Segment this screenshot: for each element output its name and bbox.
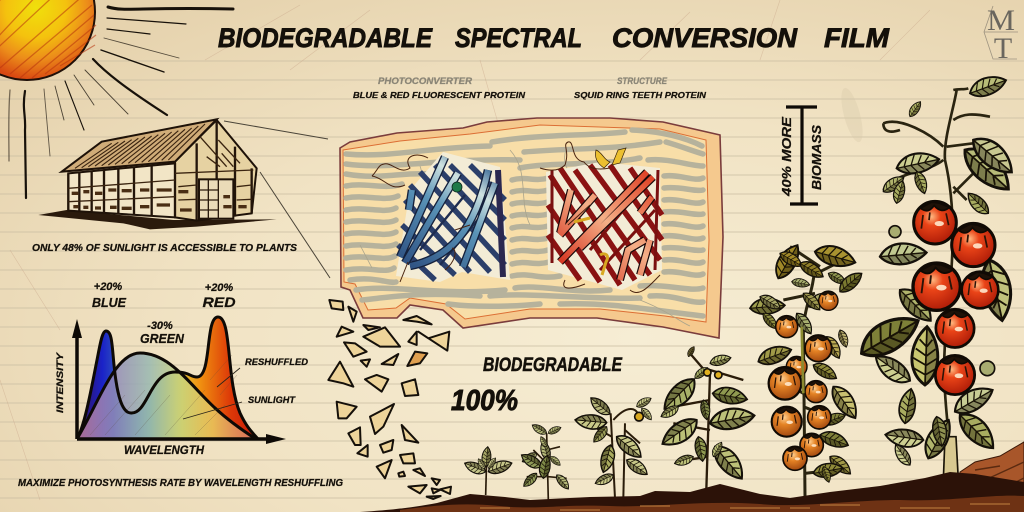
biodegradable label: BIODEGRADABLE — [483, 355, 623, 376]
protein labels: STRUCTURE — [617, 76, 668, 86]
chart caption: MAXIMIZE PHOTOSYNTHESIS RATE BY WAVELENGTH RESHUFFLING — [18, 478, 343, 489]
plant stage 5: medium tomato plant — [749, 241, 865, 497]
biomass indicator: 40% MORE — [779, 117, 794, 197]
chart labels: SUNLIGHT — [248, 395, 297, 405]
chart labels: BLUE — [92, 295, 126, 310]
blue fluorescent protein — [372, 152, 510, 282]
panel: biodegradable film — [340, 118, 723, 338]
title — [218, 23, 890, 53]
plant stage 3 — [574, 394, 654, 498]
title: CONVERSION — [612, 23, 798, 53]
logo monogram — [984, 4, 1018, 65]
biomass indicator: BIOMASS — [809, 125, 824, 190]
sunlight caption: ONLY 48% OF SUNLIGHT IS ACCESSIBLE TO PLANTS — [32, 242, 297, 254]
chart leader lines — [183, 368, 242, 419]
plant stage 4 — [658, 345, 756, 500]
spectrum chart — [55, 281, 309, 457]
seedling stage 2 — [519, 422, 572, 501]
chart labels: -30% — [147, 320, 173, 332]
protein labels: SQUID RING TEETH PROTEIN — [574, 90, 707, 100]
greenhouse illustration — [38, 119, 277, 229]
chart labels: RESHUFFLED — [245, 357, 309, 367]
chart labels: RED — [202, 294, 236, 310]
chart labels: WAVELENGTH — [124, 443, 204, 457]
leader lines from greenhouse to film — [224, 121, 330, 278]
film fragments — [328, 300, 451, 499]
protein labels: BLUE & RED FLUORESCENT PROTEIN — [353, 90, 526, 100]
protein labels: PHOTOCONVERTER — [378, 76, 473, 86]
sun rays — [9, 7, 233, 198]
icon: sun — [0, 0, 96, 80]
red fluorescent protein — [540, 142, 662, 292]
chart axes with arrows — [72, 319, 286, 444]
logo monogram: M — [987, 4, 1015, 37]
plant stage 6: tall tomato plant — [854, 72, 1019, 480]
title: SPECTRAL — [455, 23, 582, 53]
chart labels: GREEN — [140, 331, 185, 346]
chart labels: INTENSITY — [55, 351, 66, 413]
logo monogram: T — [994, 32, 1012, 65]
chart fills: reshuffled and sunlight — [77, 317, 258, 439]
soil — [360, 442, 1024, 512]
chart labels: +20% — [94, 281, 122, 293]
biomass indicator — [779, 107, 824, 204]
title: BIODEGRADABLE — [218, 23, 433, 53]
chart labels — [55, 281, 309, 457]
chart labels: +20% — [205, 282, 233, 294]
title: FILM — [824, 23, 890, 53]
seedling stage 1 — [463, 446, 514, 495]
protein labels — [353, 76, 707, 100]
100 percent label: 100% — [451, 385, 518, 417]
reshuffled and sunlight curves — [77, 317, 258, 439]
